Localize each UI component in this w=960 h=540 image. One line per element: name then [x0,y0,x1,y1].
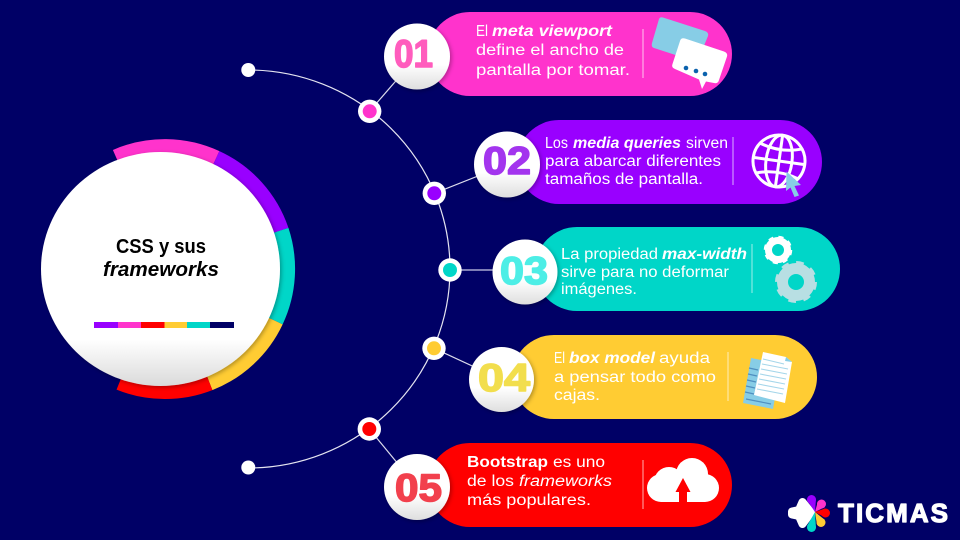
central topic circle [41,148,286,390]
text 01: define el ancho de [476,42,624,59]
number badge 03: 03 [500,250,548,293]
number badge 02 [474,132,540,198]
text 03 [561,246,747,298]
icon: cloud upload [647,458,719,502]
pill 01 [428,12,732,96]
number badge 02: 02 [483,140,531,183]
number badge 03 [492,240,558,304]
title [103,236,219,281]
timeline nodes [358,100,462,441]
text 02: para abarcar diferentes [545,153,721,170]
text 01: meta viewport [492,23,613,40]
number badge 04 [469,347,534,412]
number badge 05: 05 [395,467,442,510]
icon: flower mark [792,495,830,532]
logo: TICMAS [792,495,948,532]
divider 03 [751,244,753,293]
text 04: El [554,350,565,367]
text 03: La propiedad [561,246,658,263]
text 02: media queries [573,135,681,152]
text 02 [545,135,728,188]
text 01: El [476,23,488,40]
number badge 01: 01 [394,33,433,76]
divider 04 [727,352,729,401]
text 01 [476,23,630,79]
text 05: frameworks [519,473,612,490]
icon: chat bubbles [652,17,727,89]
text 03: imágenes. [561,281,637,298]
panel: item 01 [384,12,732,96]
panel: item 02 [474,120,822,204]
divider 01 [642,29,644,78]
pill 04 [512,335,817,419]
wordmark: TICMAS [838,498,948,528]
text 04: cajas. [554,387,600,404]
text 04 [554,350,716,404]
icon: globe with cursor [750,132,808,197]
text 05 [467,454,612,509]
text 05: Bootstrap [467,454,548,471]
text 02: Los [545,135,568,152]
panel: item 05 [384,443,732,527]
timeline end dots [241,63,255,474]
text 04: ayuda [659,350,710,367]
pill 05 [428,443,732,527]
icon: gears [766,238,814,300]
pill 02 [517,120,822,204]
title: CSS y sus [116,236,206,258]
icon: documents [743,352,792,409]
number badge 05 [384,454,450,520]
colour bar [94,322,234,328]
panel: item 03 [492,227,840,311]
connector lines [369,56,525,487]
coloured ring [116,148,286,390]
text 05: más populares. [467,492,591,509]
divider 02 [732,137,734,185]
timeline arc [248,70,450,468]
text 04: a pensar todo como [554,369,716,386]
text 04: box model [569,350,656,367]
text 05: de los [467,473,514,490]
text 01: pantalla por tomar. [476,62,630,79]
number badge 01 [384,24,450,90]
text 03: max-width [662,246,747,263]
panel: item 04 [469,335,817,419]
pill 03 [535,227,840,311]
divider 05 [642,460,644,509]
text 03: sirve para no deformar [561,264,729,281]
text 02: tamaños de pantalla. [545,171,703,188]
title: frameworks [103,259,219,281]
text 02: sirven [686,135,728,152]
text 05: es uno [553,454,605,471]
number badge 04: 04 [478,357,530,400]
white disc [41,152,280,386]
